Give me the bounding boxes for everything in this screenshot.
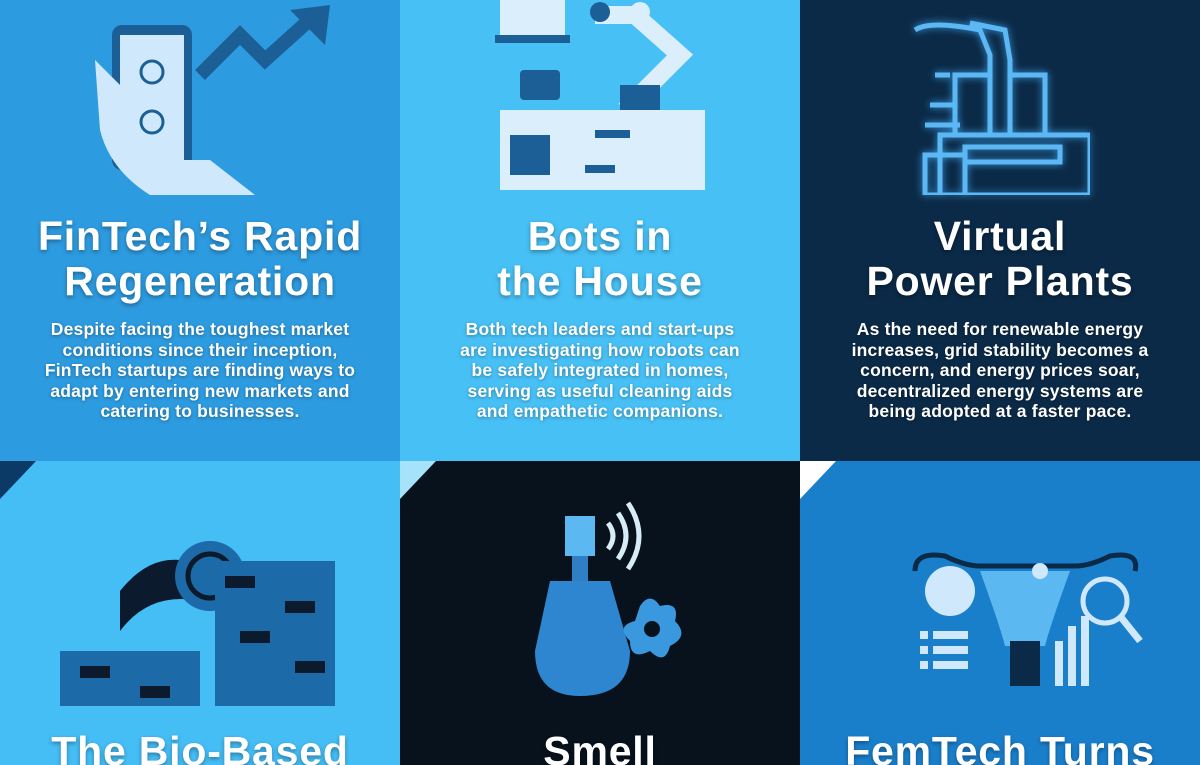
- text block: catering to businesses.: [100, 401, 300, 421]
- text block: Both tech leaders and start-ups: [466, 319, 734, 339]
- text block: FinTech startups are finding ways to: [45, 360, 355, 380]
- text block: decentralized energy systems are: [857, 380, 1143, 400]
- heading: [866, 213, 1134, 304]
- icon: phone with trend arrow: [95, 5, 330, 195]
- text block: Despite facing the toughest market: [51, 319, 349, 339]
- icon: mushroom and bricks: [60, 541, 335, 706]
- heading: Virtual: [934, 213, 1066, 259]
- text block: being adopted at a faster pace.: [869, 401, 1131, 421]
- heading: Regeneration: [64, 258, 336, 304]
- panel: bio-based: [0, 461, 400, 765]
- text block: [459, 319, 740, 423]
- heading: Power Plants: [866, 258, 1134, 304]
- panel: bots: [400, 0, 800, 461]
- text block: increases, grid stability becomes a: [852, 340, 1148, 360]
- panel: femtech: [800, 461, 1200, 765]
- text block: concern, and energy prices soar,: [860, 360, 1140, 380]
- text block: As the need for renewable energy: [857, 319, 1143, 339]
- heading: [38, 213, 362, 308]
- heading: the House: [497, 258, 703, 304]
- text block: are investigating how robots can: [460, 340, 740, 360]
- text block: serving as useful cleaning aids: [468, 380, 732, 400]
- panel: fintech: [0, 0, 400, 461]
- text block: [852, 319, 1148, 422]
- icon: perfume bottle with flower: [535, 502, 682, 696]
- icon: corner triangle: [400, 461, 436, 499]
- text block: conditions since their inception,: [63, 340, 337, 360]
- panel: smell: [400, 461, 800, 765]
- icon: neon power plant: [910, 16, 1096, 200]
- text block: adapt by entering new markets and: [50, 380, 350, 400]
- icon: corner triangle: [800, 461, 836, 499]
- panel: virtual power plants: [800, 0, 1200, 461]
- text block: [44, 319, 356, 423]
- heading: [496, 213, 703, 304]
- text block: be safely integrated in homes,: [472, 360, 728, 380]
- icon: uterus with charts: [912, 552, 1143, 686]
- heading: Bots in: [528, 213, 672, 259]
- icon: corner triangle: [0, 461, 36, 499]
- text block: and empathetic companions.: [477, 401, 723, 421]
- heading: FinTech’s Rapid: [38, 213, 362, 259]
- icon: robot kitchen: [495, 0, 705, 190]
